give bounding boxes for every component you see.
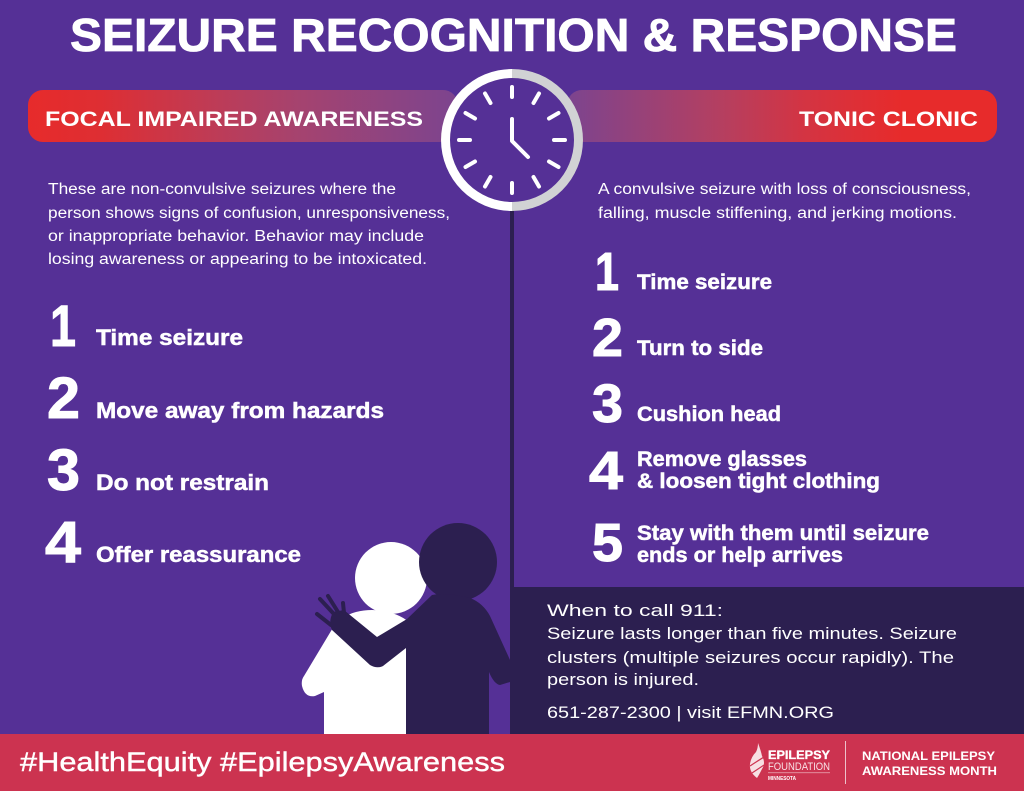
text: focal description: or inappropriate behavior. Behavior may include	[48, 228, 424, 245]
label: national epilepsy awareness month	[862, 749, 997, 778]
title: SEIZURE RECOGNITION & RESPONSE	[70, 9, 957, 61]
center divider	[510, 205, 514, 587]
steps: tonic clonic: Stay with them until seizure	[637, 522, 929, 545]
steps: tonic clonic: Turn to side	[637, 337, 763, 360]
banner: tonic clonic: TONIC CLONIC	[799, 107, 978, 131]
panel: when to call 911	[510, 587, 1024, 734]
label: national epilepsy awareness month: NATIONAL EPILEPSY	[862, 749, 995, 763]
steps: tonic clonic: 1	[595, 242, 619, 302]
logo: epilepsy foundation: MINNESOTA	[768, 776, 796, 782]
text: focal description: person shows signs of confusion, unresponsiveness,	[48, 205, 450, 222]
banner: focal impaired awareness: FOCAL IMPAIRED AWARENESS	[45, 107, 423, 131]
text: tonic clonic description: A convulsive seizure with loss of consciousness,	[598, 181, 971, 198]
steps: tonic clonic: 4	[589, 441, 623, 501]
panel: when to call 911: person is injured.	[547, 670, 699, 689]
footer band	[0, 734, 1024, 791]
white person	[302, 542, 427, 734]
steps: tonic clonic: & loosen tight clothing	[637, 470, 880, 493]
logo: epilepsy foundation	[750, 743, 830, 782]
panel: when to call 911: When to call 911:	[547, 601, 723, 620]
text: tonic clonic description: falling, muscle stiffening, and jerking motions.	[598, 205, 957, 222]
text: tonic clonic description	[598, 181, 971, 222]
steps: tonic clonic: Cushion head	[637, 403, 781, 426]
panel: when to call 911: clusters (multiple seizures occur rapidly). The	[547, 648, 954, 667]
label: national epilepsy awareness month: AWARENESS MONTH	[862, 764, 997, 778]
steps: tonic clonic: 3	[592, 374, 623, 434]
steps: focal impaired awareness: 1	[50, 294, 76, 359]
steps: tonic clonic: 2	[592, 308, 623, 368]
text: focal description	[48, 181, 450, 268]
steps: tonic clonic: 5	[592, 513, 623, 573]
banner: tonic clonic	[567, 90, 997, 142]
steps: focal impaired awareness: Offer reassurance	[96, 542, 301, 567]
steps: focal impaired awareness: 2	[47, 366, 80, 431]
text: focal description: losing awareness or appearing to be intoxicated.	[48, 251, 427, 268]
steps: focal impaired awareness: Do not restrain	[96, 470, 269, 495]
steps: focal impaired awareness: 4	[45, 510, 81, 575]
logo: epilepsy foundation: EPILEPSY	[768, 748, 830, 762]
text: focal description: These are non-convulsive seizures where the	[48, 181, 396, 198]
banner: focal impaired awareness	[28, 90, 458, 142]
panel: when to call 911: Seizure lasts longer than five minutes. Seizure	[547, 624, 957, 643]
steps: focal impaired awareness: 3	[47, 438, 80, 503]
steps: tonic clonic: Time seizure	[637, 271, 772, 294]
steps: focal impaired awareness: Move away from hazards	[96, 398, 384, 423]
dark person	[317, 523, 510, 734]
steps: focal impaired awareness	[45, 294, 384, 575]
icon: clock	[441, 69, 583, 211]
steps: tonic clonic: ends or help arrives	[637, 544, 843, 567]
steps: tonic clonic: Remove glasses	[637, 448, 807, 471]
illustration: two people	[302, 523, 510, 734]
panel: when to call 911: 651-287-2300 | visit EFMN.ORG	[547, 703, 834, 722]
hashtags: #HealthEquity #EpilepsyAwareness	[20, 747, 505, 777]
steps: focal impaired awareness: Time seizure	[96, 325, 243, 350]
logo: epilepsy foundation: FOUNDATION	[768, 761, 830, 773]
steps: tonic clonic	[589, 242, 929, 573]
